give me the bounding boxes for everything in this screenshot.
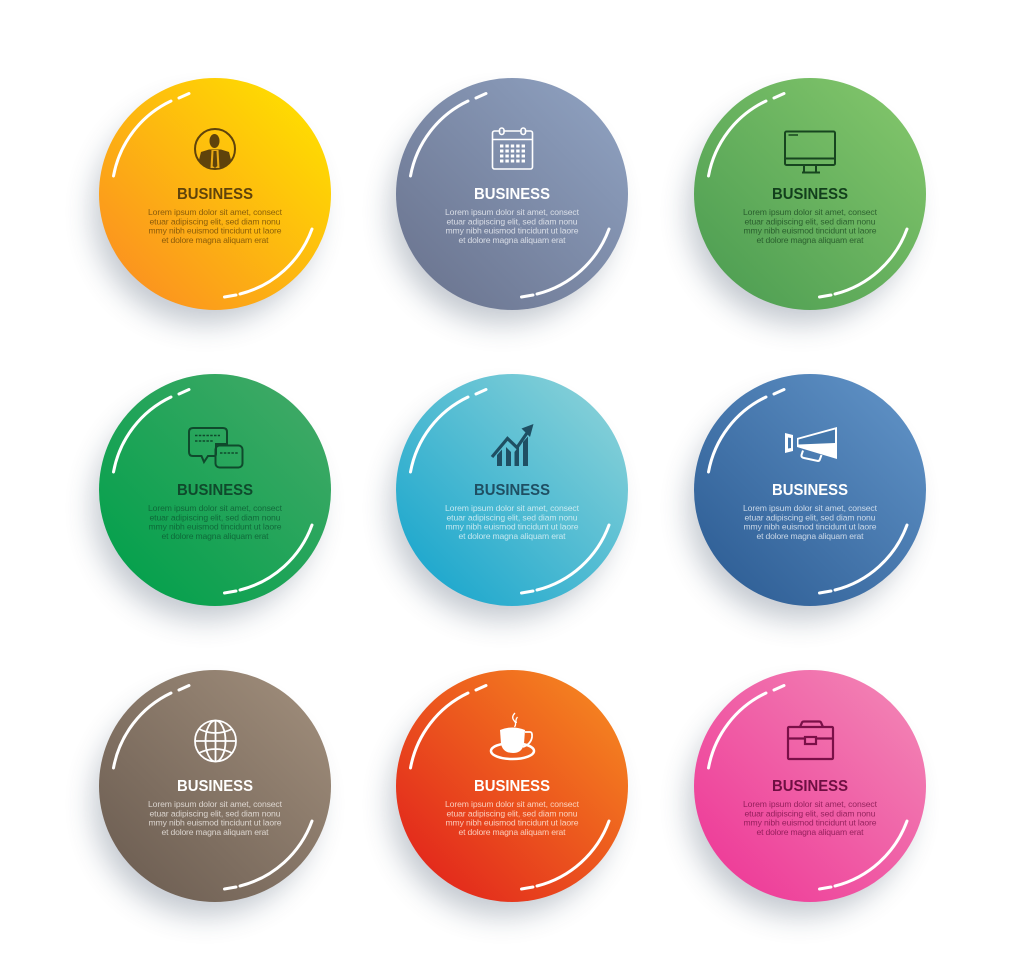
text block bbox=[445, 799, 580, 837]
panel: yellow business circle bbox=[93, 78, 331, 324]
text block: et dolore magna aliquam erat bbox=[458, 235, 566, 245]
text block: et dolore magna aliquam erat bbox=[162, 531, 269, 541]
icon: coffee cup bbox=[491, 713, 534, 759]
icon: calendar bbox=[492, 128, 532, 169]
text block: mmy nibh euismod tincidunt ut laore bbox=[446, 226, 579, 236]
panel: blue business circle bbox=[688, 374, 926, 620]
heading: BUSINESS bbox=[177, 186, 253, 203]
panel: brown business circle bbox=[93, 670, 331, 916]
panel: pink business circle bbox=[688, 670, 926, 916]
text block: et dolore magna aliquam erat bbox=[162, 827, 269, 837]
text block: et dolore magna aliquam erat bbox=[162, 235, 269, 245]
text block: et dolore magna aliquam erat bbox=[756, 235, 864, 245]
heading: BUSINESS bbox=[177, 482, 253, 499]
heading: BUSINESS bbox=[772, 482, 848, 499]
text block bbox=[148, 207, 283, 245]
icon: megaphone bbox=[785, 427, 837, 461]
icon: globe bbox=[195, 720, 236, 762]
panel: orange business circle bbox=[390, 670, 628, 916]
text block bbox=[148, 799, 283, 837]
text block: mmy nibh euismod tincidunt ut laore bbox=[446, 522, 579, 532]
text block bbox=[148, 503, 283, 541]
panel: light green business circle bbox=[688, 78, 926, 324]
text block: etuar adipiscing elit, sed diam nonu bbox=[446, 216, 578, 226]
text block: mmy nibh euismod tincidunt ut laore bbox=[744, 522, 877, 532]
icon: briefcase bbox=[788, 722, 833, 759]
text block: et dolore magna aliquam erat bbox=[756, 531, 864, 541]
icon: speech bubbles bbox=[189, 428, 242, 468]
text block: etuar adipiscing elit, sed diam nonu bbox=[744, 216, 876, 226]
text block: mmy nibh euismod tincidunt ut laore bbox=[148, 818, 282, 828]
text block: Lorem ipsum dolor sit amet, consect bbox=[445, 503, 580, 513]
text block: etuar adipiscing elit, sed diam nonu bbox=[446, 808, 578, 818]
text block: Lorem ipsum dolor sit amet, consect bbox=[148, 503, 283, 513]
heading: BUSINESS bbox=[772, 778, 848, 795]
text block: mmy nibh euismod tincidunt ut laore bbox=[148, 226, 282, 236]
text block: Lorem ipsum dolor sit amet, consect bbox=[743, 799, 878, 809]
text block: etuar adipiscing elit, sed diam nonu bbox=[150, 512, 281, 522]
text block: etuar adipiscing elit, sed diam nonu bbox=[446, 512, 578, 522]
text block: mmy nibh euismod tincidunt ut laore bbox=[148, 522, 282, 532]
text block: etuar adipiscing elit, sed diam nonu bbox=[150, 808, 281, 818]
text block: mmy nibh euismod tincidunt ut laore bbox=[446, 818, 579, 828]
panel: teal business circle bbox=[390, 374, 628, 620]
text block: Lorem ipsum dolor sit amet, consect bbox=[743, 503, 878, 513]
text block: etuar adipiscing elit, sed diam nonu bbox=[744, 512, 876, 522]
panel: slate business circle bbox=[390, 78, 628, 324]
icon: growth chart bbox=[492, 424, 534, 466]
heading: BUSINESS bbox=[474, 482, 550, 499]
text block: et dolore magna aliquam erat bbox=[458, 827, 566, 837]
text block: etuar adipiscing elit, sed diam nonu bbox=[150, 216, 281, 226]
text block bbox=[743, 799, 878, 837]
heading: BUSINESS bbox=[474, 778, 550, 795]
icon: businessman bbox=[195, 129, 235, 169]
text block bbox=[743, 503, 878, 541]
text block: Lorem ipsum dolor sit amet, consect bbox=[445, 207, 580, 217]
text block: etuar adipiscing elit, sed diam nonu bbox=[744, 808, 876, 818]
text block: mmy nibh euismod tincidunt ut laore bbox=[744, 818, 877, 828]
text block: Lorem ipsum dolor sit amet, consect bbox=[148, 799, 283, 809]
text block bbox=[445, 207, 580, 245]
text block: Lorem ipsum dolor sit amet, consect bbox=[445, 799, 580, 809]
heading: BUSINESS bbox=[177, 778, 253, 795]
text block: mmy nibh euismod tincidunt ut laore bbox=[744, 226, 877, 236]
text block: Lorem ipsum dolor sit amet, consect bbox=[743, 207, 878, 217]
heading: BUSINESS bbox=[474, 186, 550, 203]
text block: Lorem ipsum dolor sit amet, consect bbox=[148, 207, 283, 217]
text block bbox=[743, 207, 878, 245]
panel: dark green business circle bbox=[93, 374, 331, 620]
text block: et dolore magna aliquam erat bbox=[458, 531, 566, 541]
text block bbox=[445, 503, 580, 541]
icon: monitor bbox=[785, 132, 835, 172]
text block: et dolore magna aliquam erat bbox=[756, 827, 864, 837]
heading: BUSINESS bbox=[772, 186, 848, 203]
